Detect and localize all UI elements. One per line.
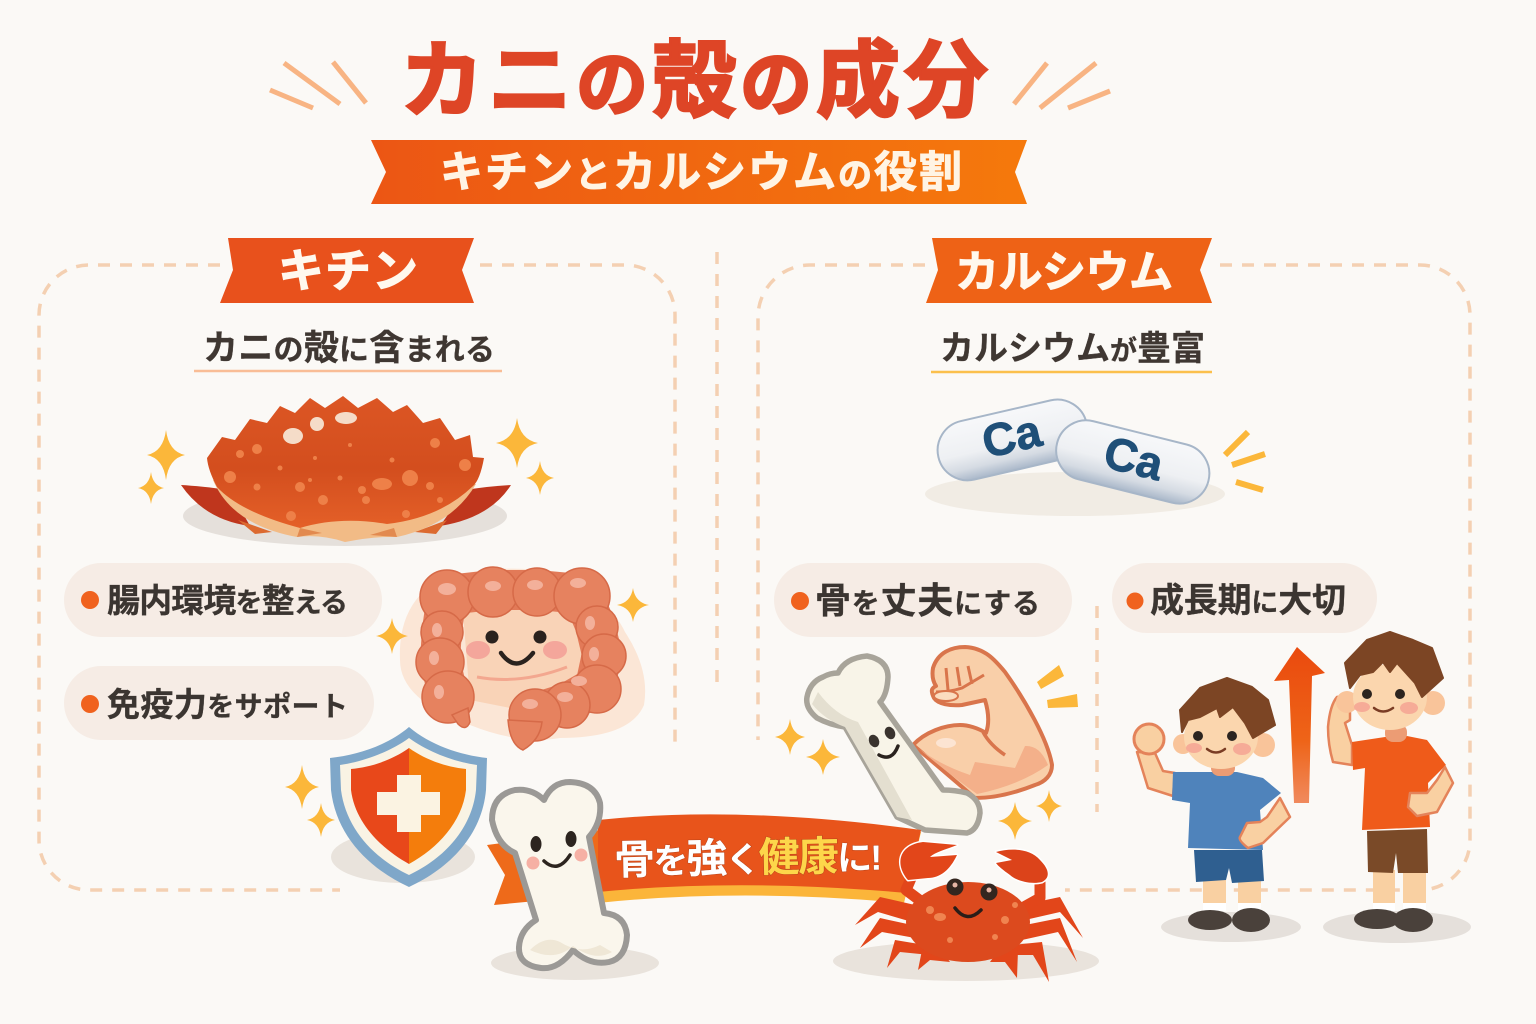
calcium ribbon <box>926 238 1212 303</box>
illustration: bone character <box>491 782 659 980</box>
illustration: calcium tablets: Ca <box>1099 426 1169 491</box>
sparkles: intestine <box>376 588 649 654</box>
panel: chitin <box>39 238 675 890</box>
title rays right <box>1014 63 1110 108</box>
bottom banner: 骨を強く健康に! <box>614 833 882 883</box>
illustration: calcium tablets: Ca <box>977 404 1046 468</box>
pill: stronger bones <box>774 563 1072 637</box>
subtitle ribbon <box>371 140 1027 204</box>
arm power rays <box>1037 665 1078 708</box>
panel: calcium <box>758 238 1471 943</box>
illustration: smiling red crab <box>833 842 1099 982</box>
chitin ribbon: キチン <box>278 245 418 297</box>
pill: gut environment: 腸内環境を整える <box>107 582 348 619</box>
illustration: smaller boy <box>1134 678 1301 942</box>
title: カニの殻の成分 <box>400 34 988 128</box>
illustration: bone with face <box>807 656 980 833</box>
sparkles: arm <box>775 719 1062 840</box>
calcium ribbon: カルシウム <box>955 248 1173 297</box>
tablet shine rays <box>1225 432 1265 490</box>
illustration: taller boy <box>1323 632 1471 943</box>
pill: immunity <box>64 666 374 740</box>
title rays left <box>270 62 366 108</box>
illustration: shield <box>330 727 487 887</box>
subtitle ribbon: キチンとカルシウムの役割 <box>440 149 962 197</box>
illustration: calcium tablets <box>925 394 1225 516</box>
growth arrow <box>1274 647 1325 803</box>
calcium subheading: カルシウムが豊富 <box>940 330 1205 368</box>
chitin subheading: カニの殻に含まれる <box>203 329 495 368</box>
pill: gut environment <box>64 563 382 637</box>
pill: growth period <box>1112 563 1377 633</box>
bottom banner <box>487 814 921 905</box>
illustration: smiling intestine <box>400 567 645 750</box>
sparkles: shell <box>138 418 554 504</box>
pill: growth period: 成長期に大切 <box>1150 582 1346 620</box>
illustration: flexing arm <box>913 647 1052 798</box>
pill: stronger bones: 骨を丈夫にする <box>815 580 1040 621</box>
pill: immunity: 免疫力をサポート <box>107 686 348 723</box>
divider lines <box>717 252 1097 812</box>
chitin ribbon <box>220 238 474 303</box>
sparkles: shield <box>285 765 335 837</box>
illustration: crab shell <box>181 396 511 546</box>
